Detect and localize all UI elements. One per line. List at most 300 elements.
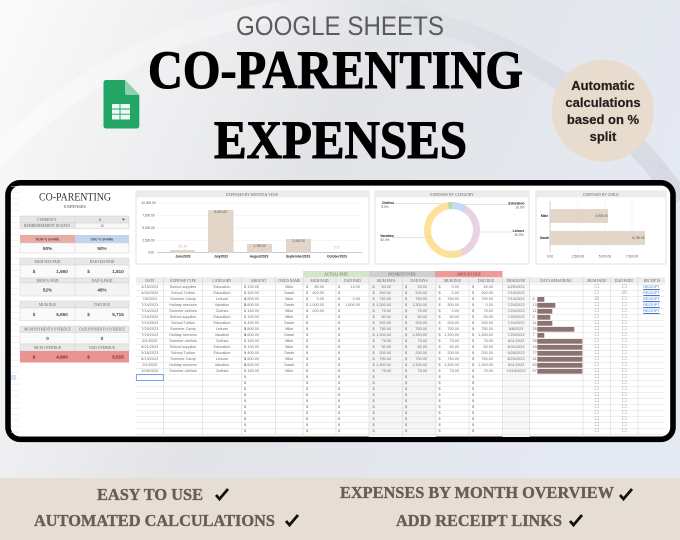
overdue summary: 4,900 (56, 354, 68, 360)
column: mum paid dollar signs: $ (306, 429, 308, 433)
column: amount dollar signs: $ (244, 285, 246, 289)
column: mum pays dollar signs: $ (372, 345, 375, 349)
column: amount dollar signs: $ (244, 357, 246, 361)
column: dad due: 200.00 (481, 291, 493, 295)
donut chart: expenses by category: 10.0% (515, 206, 525, 210)
column: amount dollar signs (244, 285, 246, 433)
column: dad pays: 1,300.00 (412, 363, 427, 367)
column: amount dollar signs: $ (244, 303, 246, 307)
donut chart: expenses by category: Leisure (513, 229, 525, 233)
column: dad pays: 750.00 (415, 357, 427, 361)
column: mum due dollar signs: $ (438, 363, 441, 367)
column: dad paid dollar signs: $ (338, 387, 340, 391)
column: amount dollar signs: $ (244, 387, 246, 391)
column: deadline: 4/29/2023 (508, 285, 524, 289)
column: dad due dollar signs: $ (472, 363, 474, 367)
column: mum pays dollar signs: $ (372, 423, 375, 427)
column: mum pays dollar signs: $ (372, 315, 375, 319)
column: amount dollar signs: $ (244, 309, 246, 313)
column: child name: Sarah (284, 303, 294, 307)
column: expense type: Summer Camp (170, 327, 196, 331)
column: mum paid dollar signs: $ (306, 327, 308, 331)
feature: add receipt links: ADD RECEIPT LINKS (396, 511, 562, 530)
table group headers (303, 271, 502, 277)
sidebar title: CO-PARENTING (39, 191, 111, 203)
column: deadline (506, 285, 526, 373)
settings: currency and reimbursement: 10 (100, 224, 104, 228)
title line two: EXPENSES (214, 110, 467, 170)
column: dad pays dollar signs: $ (405, 345, 407, 349)
column: amount dollar signs: $ (244, 291, 246, 295)
donut chart: expenses by category: 52.0% (380, 238, 390, 242)
column: day's remaining: 11 (532, 321, 536, 325)
bar chart: expenses by month and year: 8,650.00 (214, 210, 227, 214)
column: mum due: 200.00 (447, 321, 459, 325)
column: deadline: 7/24/2023 (508, 309, 524, 313)
column: mum pays dollar signs: $ (372, 285, 375, 289)
column: dad paid dollar signs: $ (338, 339, 340, 343)
amounts paid: MUM % PAID (37, 279, 59, 283)
amounts due: 5,715 (112, 312, 124, 317)
donut chart: expenses by category (375, 191, 529, 264)
column: dad pays dollar signs: $ (405, 423, 407, 427)
column: amount dollar signs: $ (244, 381, 246, 385)
column: mum due dollar signs: $ (438, 387, 441, 391)
column: dad paid dollar signs: $ (338, 357, 340, 361)
column: dad pays dollar signs: $ (405, 327, 407, 331)
column: dad paid: 0.00 (353, 297, 360, 301)
column: day's remaining: 9 (532, 315, 535, 319)
column: category: Clothes (216, 339, 228, 343)
column: dad due dollar signs: $ (472, 369, 474, 373)
column: expense type: School supplies (170, 285, 196, 289)
column: dad paid checkboxes: ☐ (622, 314, 627, 320)
column: dad paid checkboxes: ☐ (622, 368, 627, 374)
column: dad pays dollar signs: $ (405, 363, 407, 367)
callout: automatic calculations: Automatic (571, 78, 635, 93)
column: mum due dollar signs: $ (438, 351, 441, 355)
column: dad pays (412, 285, 427, 373)
amounts paid: 52% (43, 288, 52, 292)
column: date: 7/8/2023 (142, 297, 157, 301)
column: mum paid dollar signs: $ (306, 393, 308, 397)
column: receipt links: RECEIPT (643, 309, 660, 313)
panel: expense table grid (136, 271, 665, 437)
column: mum paid: 0.00 (317, 297, 324, 301)
column: amount dollar signs: $ (244, 417, 246, 421)
column: mum paid dollar signs (306, 285, 308, 433)
column: dad pays: 75.00 (417, 369, 427, 373)
amounts due: 5,650 (56, 312, 68, 317)
column: dad paid dollar signs: $ (338, 297, 340, 301)
column: amount dollar signs: $ (244, 351, 246, 355)
amounts paid: MUM HAS PAID (34, 260, 61, 264)
column: category: Vacation (215, 303, 229, 307)
column: category: Leisure (216, 357, 228, 361)
column: dad pays dollar signs: $ (405, 333, 407, 337)
bar chart: expenses by month and year: EXPENSES BY MONTH & YEAR (226, 193, 279, 197)
column: dad paid dollar signs: $ (338, 411, 340, 415)
column: dad pays dollar signs: $ (405, 369, 407, 373)
bar chart: expenses by month and year: August2023 (250, 254, 269, 258)
column: mum pays dollar signs: $ (372, 363, 375, 367)
column: mum due dollar signs (438, 285, 441, 433)
column: child name: Mike (285, 339, 293, 343)
settings: currency and reimbursement: $ (99, 218, 101, 222)
column: category: Clothes (216, 309, 228, 313)
column: dad pays dollar signs: $ (405, 399, 407, 403)
table group headers: AMOUNT DUE (457, 273, 481, 277)
column: dad pays dollar signs: $ (405, 297, 407, 301)
column: date: 8/1/2023 (142, 339, 157, 343)
column: dad paid checkboxes: ☐ (622, 398, 627, 404)
column: mum paid dollar signs: $ (306, 315, 308, 319)
column: dad due dollar signs: $ (472, 417, 474, 421)
column: dad paid dollar signs: $ (338, 429, 340, 433)
column: mum due: 750.00 (447, 297, 459, 301)
column: amount: 100.00 (247, 345, 259, 349)
column: receipt links: RECEIPT (643, 285, 660, 289)
column: amount: 150.00 (247, 339, 259, 343)
column: mum pays dollar signs: $ (372, 369, 375, 373)
amounts due (20, 301, 129, 320)
column: dad paid dollar signs: $ (338, 309, 340, 313)
column: expense type: Summer clothes (169, 339, 197, 343)
column: amount dollar signs: $ (244, 423, 246, 427)
column: mum paid checkboxes: ☐ (594, 284, 599, 290)
column: mum paid dollar signs: $ (306, 339, 308, 343)
column: expense type: Summer clothes (169, 369, 197, 373)
column: mum paid dollar signs: $ (306, 387, 308, 391)
column: mum paid checkboxes: ☐ (594, 416, 599, 422)
column: mum paid (309, 285, 324, 313)
split percentages: 50% (43, 246, 52, 251)
column: child name (284, 285, 294, 373)
column: mum paid dollar signs: $ (306, 363, 308, 367)
split percentages: 50% (97, 246, 107, 251)
column: mum due dollar signs: $ (438, 297, 441, 301)
column: dad due dollar signs: $ (472, 315, 474, 319)
column: mum paid checkboxes: ☐ (594, 302, 599, 308)
column: mum paid checkboxes: ☐ (594, 380, 599, 386)
column: mum due: 75.00 (449, 339, 459, 343)
column: expense type: School supplies (170, 315, 196, 319)
column: date: 7/14/2023 (141, 321, 158, 325)
amounts paid: 1,810 (112, 269, 124, 274)
column: mum paid: 200.00 (312, 309, 324, 313)
column: mum pays dollar signs: $ (372, 339, 375, 343)
column: day's remaining: 26 (532, 327, 537, 331)
column: date: 9/18/2023 (141, 351, 158, 355)
column: dad pays: 50.00 (417, 345, 427, 349)
column: mum pays dollar signs: $ (372, 297, 375, 301)
column: dad due: 75.00 (483, 339, 493, 343)
column: mum due dollar signs: $ (438, 327, 441, 331)
table column headers: MUM PAID (311, 279, 329, 283)
column: amount: 150.00 (247, 309, 259, 313)
column: mum paid dollar signs: $ (306, 321, 308, 325)
column: dad due dollar signs: $ (472, 297, 474, 301)
column: day's remaining: 39 (532, 339, 537, 343)
column: dad paid checkboxes: ☐ (622, 296, 627, 302)
bar chart: expenses by child (536, 191, 666, 264)
column: mum pays dollar signs: $ (372, 393, 375, 397)
column: mum paid checkboxes: ☐ (594, 332, 599, 338)
column: mum due: 1,300.00 (444, 333, 459, 337)
column: dad due (478, 285, 493, 373)
column: child name: Mike (285, 369, 293, 373)
overdue summary: MUM OVERDUE (34, 346, 62, 350)
column: dad paid dollar signs: $ (338, 303, 340, 307)
column: mum pays dollar signs: $ (372, 381, 375, 385)
column: mum pays dollar signs: $ (372, 303, 375, 307)
column: day's remaining: 49 (532, 345, 537, 349)
table group headers: PAYMENT OVER (388, 273, 416, 277)
column: dad pays: 75.00 (417, 309, 427, 313)
column: dad pays: 75.00 (417, 339, 427, 343)
column: dad paid checkboxes: ☐ (622, 338, 627, 344)
column: date: 4/15/2023 (141, 285, 158, 289)
column: mum due (444, 285, 459, 373)
column: dad pays: 750.00 (415, 297, 427, 301)
column: receipt links: RECEIPT (643, 303, 660, 307)
column: dad due dollar signs: $ (472, 327, 474, 331)
column: mum due: 50.00 (449, 345, 459, 349)
column: mum paid checkboxes: ☐ (594, 374, 599, 380)
column: mum paid dollar signs: $ (306, 285, 308, 289)
column: date: 8/13/2023 (141, 357, 158, 361)
overdue summary: $ (33, 354, 36, 360)
column: mum pays dollar signs (372, 285, 375, 433)
column: dad due: 75.00 (483, 369, 493, 373)
amounts due: $ (87, 312, 90, 317)
bar chart: expenses by child: Sarah (540, 236, 549, 240)
amounts due: $ (33, 312, 36, 317)
column: deadline: 8/31/2023 (508, 345, 524, 349)
column: dad paid dollar signs: $ (338, 369, 340, 373)
amounts paid (20, 258, 129, 296)
column: amount dollar signs: $ (244, 363, 246, 367)
amounts paid: DAD % PAID (92, 279, 113, 283)
table column headers: CATEGORY (213, 279, 232, 283)
column: dad paid dollar signs: $ (338, 375, 340, 379)
column: mum pays: 750.00 (379, 357, 391, 361)
table column headers: DAY'S REMAINING (540, 279, 572, 283)
column: child name: Mike (285, 309, 293, 313)
column: mum due: 200.00 (447, 351, 459, 355)
column: mum due dollar signs: $ (438, 429, 441, 433)
column: expense type: Holiday services (169, 333, 197, 337)
column: dad due dollar signs: $ (472, 399, 474, 403)
column: mum due: 750.00 (447, 357, 459, 361)
column: mum due dollar signs: $ (438, 375, 441, 379)
column: day's remaining (532, 297, 537, 373)
column: dad due: 200.00 (481, 321, 493, 325)
column: dad paid (345, 285, 360, 307)
column: receipt links: RECEIPT (643, 291, 660, 295)
column: mum paid: 1,000.00 (309, 303, 324, 307)
column: dad pays dollar signs: $ (405, 309, 407, 313)
column: mum pays: 200.00 (379, 321, 391, 325)
column: dad due dollar signs: $ (472, 423, 474, 427)
column: date: 7/15/2023 (141, 315, 158, 319)
column: dad paid dollar signs: $ (338, 285, 340, 289)
column: mum paid dollar signs: $ (306, 357, 308, 361)
column: category: Vacation (215, 333, 229, 337)
overdue summary: MUM PAYMENTS OVERDUE (24, 328, 72, 332)
column: mum pays: 750.00 (379, 297, 391, 301)
column: mum pays dollar signs: $ (372, 321, 375, 325)
table column headers: MUM PAID? (587, 279, 607, 283)
column: dad due: 750.00 (481, 357, 493, 361)
overdue summary: 0 (101, 336, 104, 341)
overdue summary: DAD OVERDUE (89, 346, 116, 350)
column: dad paid checkboxes: ☐ (622, 344, 627, 350)
column: dad pays: 200.00 (415, 291, 427, 295)
column: deadline: 7/10/2023 (508, 291, 524, 295)
column: dad paid dollar signs: $ (338, 345, 340, 349)
column: dad paid dollar signs: $ (338, 333, 340, 337)
column: date: 8/21/2023 (141, 345, 158, 349)
column: amount dollar signs: $ (244, 345, 246, 349)
column: mum due: 0.00 (452, 309, 459, 313)
bar chart: expenses by month and year: 7,500.00 (142, 214, 155, 218)
heading: Google Sheets: GOOGLE SHEETS (236, 11, 444, 41)
column: category: Leisure (216, 297, 228, 301)
column: dad pays dollar signs: $ (405, 411, 407, 415)
bar chart: expenses by child: 4,900.00 (595, 214, 608, 218)
overdue summary: 0 (46, 336, 49, 341)
column: dad due: 0.00 (486, 303, 493, 307)
feature: automated calculations: AUTOMATED CALCULATIONS (34, 511, 275, 530)
column: dad pays dollar signs: $ (405, 315, 407, 319)
column: dad paid checkboxes: ☐ (622, 374, 627, 380)
overdue summary: $ (87, 354, 90, 360)
column: mum paid checkboxes: ☐ (594, 308, 599, 314)
column: mum paid checkboxes: ☐ (594, 320, 599, 326)
column: dad paid checkboxes: ☐ (622, 422, 627, 428)
column: category: Education (214, 291, 230, 295)
column: mum pays: 50.00 (381, 285, 391, 289)
column: mum paid dollar signs: $ (306, 405, 308, 409)
column: expense type: Summer Camp (170, 357, 196, 361)
donut chart: expenses by category: EXPENSES BY CATEGORY (430, 193, 474, 197)
split percentages: DAD % SHARE (91, 238, 113, 242)
column: date: 7/15/2023 (141, 333, 158, 337)
column: mum pays dollar signs: $ (372, 387, 375, 391)
column: date: 7/14/2023 (141, 303, 158, 307)
table column headers: DAD DUE (478, 279, 495, 283)
column: dad due dollar signs: $ (472, 333, 474, 337)
column: mum pays: 750.00 (379, 327, 391, 331)
table column headers: MUM PAYS (377, 279, 395, 283)
column: expense type (169, 285, 197, 373)
column: dad due dollar signs: $ (472, 411, 474, 415)
column: dad paid checkboxes: ☐ (622, 332, 627, 338)
column: amount dollar signs: $ (244, 411, 246, 415)
column: dad due: 200.00 (481, 351, 493, 355)
column: dad paid checkboxes: ☐ (622, 410, 627, 416)
split percentages: MUM % SHARE (36, 238, 59, 242)
column: dad pays: 50.00 (417, 285, 427, 289)
column: mum due: 0.00 (452, 285, 459, 289)
column: mum due dollar signs: $ (438, 315, 441, 319)
column: mum pays dollar signs: $ (372, 291, 375, 295)
bar chart: expenses by month and year: 0.00 (148, 250, 154, 254)
donut chart: expenses by category: 30.0% (514, 233, 524, 237)
table column headers: DEADLINE (507, 279, 526, 283)
column: dad pays dollar signs: $ (405, 405, 407, 409)
column: deadline: 7/24/2023 (508, 303, 524, 307)
column: receipt links: RECEIPT (643, 297, 660, 301)
column: amount: 150.00 (247, 369, 259, 373)
column: category (214, 285, 230, 373)
column: amount dollar signs: $ (244, 369, 246, 373)
feature: expenses by month overview: EXPENSES BY MONTH OVERVIEW (340, 483, 614, 502)
column: category: Education (214, 345, 230, 349)
column: category: Education (214, 321, 230, 325)
column: dad paid dollar signs: $ (338, 291, 340, 295)
column: dad pays dollar signs: $ (405, 417, 407, 421)
column: dad due: 50.00 (483, 345, 493, 349)
column: mum paid checkboxes: ☐ (594, 422, 599, 428)
column: mum paid checkboxes: ☐ (594, 338, 599, 344)
bar chart: expenses by child: EXPENSES BY CHILD (583, 193, 619, 197)
bar chart: expenses by month and year: September2023 (286, 254, 310, 258)
column: mum due dollar signs: $ (438, 285, 441, 289)
day's remaining data bars (537, 297, 582, 374)
column: deadline: 8/8/2023 (509, 327, 523, 331)
column: mum paid dollar signs: $ (306, 417, 308, 421)
title line one: CO-PARENTING (148, 40, 523, 100)
column: dad pays dollar signs: $ (405, 429, 407, 433)
column: mum paid checkboxes: ☑ (594, 296, 599, 302)
column: amount: 400.00 (247, 321, 259, 325)
column: dad due dollar signs: $ (472, 291, 474, 295)
column: amount: 1,500.00 (244, 327, 259, 331)
column: dad due: 75.00 (483, 309, 493, 313)
column: day's remaining: 13 (532, 303, 537, 307)
column: mum pays: 50.00 (381, 345, 391, 349)
column: mum due dollar signs: $ (438, 393, 441, 397)
column: dad pays dollar signs: $ (405, 291, 407, 295)
bar chart: expenses by month and year: 1,750.00 (253, 244, 266, 248)
column: dad pays dollar signs: $ (405, 303, 407, 307)
panel: summary sidebar (20, 191, 129, 362)
donut segments (428, 206, 476, 254)
column: mum due dollar signs: $ (438, 321, 441, 325)
column: dad paid checkboxes: ☐ (622, 404, 627, 410)
column: deadline: 8/23/2023 (508, 357, 524, 361)
column: mum paid dollar signs: $ (306, 423, 308, 427)
bar chart: expenses by child: 8,750.00 (632, 236, 645, 240)
bar chart: expenses by month and year: June2023 (175, 254, 191, 258)
amounts paid: 48% (97, 288, 107, 292)
column: dad due: 40.00 (483, 285, 493, 289)
column: mum paid checkboxes: ☐ (594, 344, 599, 350)
column: receipt links (643, 285, 660, 314)
column: category: Education (214, 351, 230, 355)
column: mum pays: 1,300.00 (376, 303, 391, 307)
column: day's remaining: 97 (532, 369, 537, 373)
column: amount dollar signs: $ (244, 339, 246, 343)
column: dad paid checkboxes: ☑ (622, 290, 627, 296)
settings: currency and reimbursement: REIMBURSEMENT IN DAYS (24, 224, 70, 228)
column: mum paid dollar signs: $ (306, 381, 308, 385)
column: deadline: 8/11/2023 (508, 339, 524, 343)
column: date: 7/25/2023 (141, 327, 158, 331)
column: dad due dollar signs (472, 285, 474, 433)
